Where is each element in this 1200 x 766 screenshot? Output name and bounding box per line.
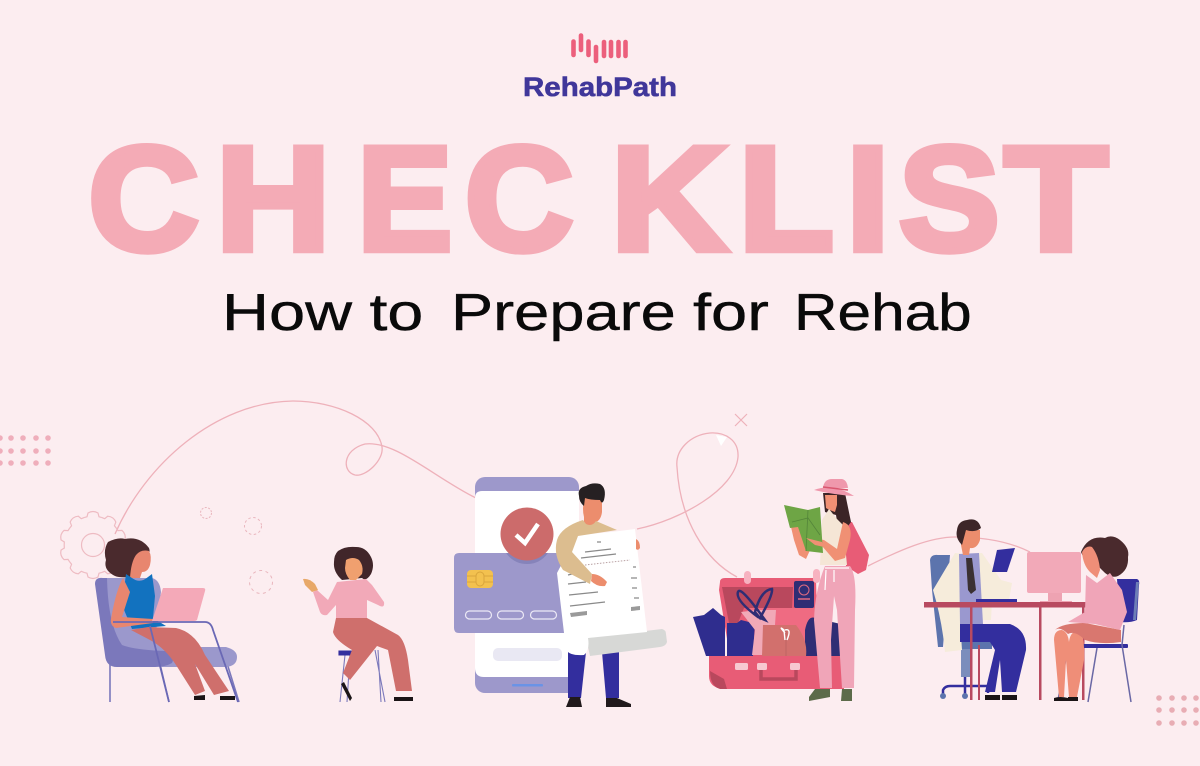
blue top bbox=[122, 574, 166, 629]
doctor chair bbox=[930, 555, 992, 699]
phone bbox=[475, 477, 579, 693]
clothes bbox=[693, 589, 848, 656]
laptop bbox=[152, 588, 205, 621]
monitor bbox=[1027, 552, 1081, 602]
shoes bbox=[194, 695, 235, 700]
traveller bbox=[784, 479, 869, 701]
left forearm behind map bbox=[791, 525, 811, 559]
hat bbox=[814, 479, 854, 496]
icon: gear outline bbox=[58, 512, 128, 578]
trousers bbox=[568, 652, 619, 698]
sweater bbox=[556, 520, 617, 584]
figure: phone, credit card and man with receipt bbox=[454, 477, 667, 707]
subtitle: How bbox=[222, 284, 353, 341]
icon: cross mark bbox=[735, 414, 747, 426]
title: CHECKLIST: I bbox=[846, 116, 889, 281]
tie bbox=[966, 558, 976, 594]
shoes bbox=[341, 682, 413, 701]
laptop on desk bbox=[976, 599, 1017, 602]
title: CHECKLIST: L bbox=[739, 117, 834, 282]
subtitle: for bbox=[693, 284, 769, 341]
subtitle bbox=[222, 283, 972, 342]
sweater bbox=[313, 579, 384, 618]
doctor trousers bbox=[960, 624, 1026, 692]
face bbox=[345, 558, 363, 580]
stool bbox=[339, 650, 385, 702]
armchair bbox=[95, 578, 239, 702]
arm bbox=[805, 522, 851, 561]
title: CHECKLIST: K bbox=[611, 116, 727, 281]
chair arm bbox=[113, 622, 238, 702]
face bbox=[825, 495, 837, 512]
figure: suitcase and traveller with map bbox=[693, 479, 869, 701]
title: CHECKLIST: T bbox=[1004, 116, 1108, 282]
arm bbox=[111, 578, 153, 628]
tablet bbox=[992, 548, 1015, 572]
title: CHECKLIST: E bbox=[358, 116, 452, 281]
hair bbox=[334, 547, 373, 580]
face bbox=[130, 550, 151, 578]
credit card bbox=[454, 553, 572, 633]
suitcase lid bbox=[719, 569, 820, 657]
icon: paper plane tip bbox=[716, 435, 727, 446]
hair bbox=[105, 538, 150, 577]
boots bbox=[809, 689, 852, 701]
figure: woman with laptop in armchair bbox=[95, 538, 239, 702]
icon: pulse bars bbox=[574, 36, 626, 61]
patient shoes bbox=[1054, 697, 1078, 701]
suitcase base bbox=[709, 656, 844, 689]
receipt roll bbox=[586, 629, 667, 656]
pointing hand bbox=[806, 538, 824, 547]
trousers bbox=[333, 618, 412, 691]
head bbox=[579, 483, 605, 532]
map bbox=[784, 505, 823, 553]
trousers bbox=[814, 566, 855, 688]
title: CHECKLIST: C bbox=[465, 116, 573, 282]
shoes bbox=[566, 697, 631, 707]
decorative dots: right bbox=[1156, 695, 1199, 726]
backpack bbox=[843, 522, 869, 574]
subtitle: to bbox=[370, 284, 423, 342]
patient hair bbox=[1081, 536, 1128, 577]
trousers bbox=[131, 627, 229, 695]
title: CHECKLIST: H bbox=[216, 117, 330, 282]
subtitle: Rehab bbox=[794, 283, 972, 341]
decorative dots: left bbox=[0, 435, 51, 466]
patient chair bbox=[1058, 579, 1139, 702]
logo: RehabPath bbox=[523, 36, 677, 102]
patient skirt bbox=[1055, 623, 1121, 643]
title: CHECKLIST bbox=[88, 116, 1108, 282]
hand bbox=[303, 579, 318, 592]
figure: doctor and patient at desk bbox=[924, 519, 1139, 702]
doctor shoes bbox=[985, 695, 1017, 700]
doctor shirt bbox=[959, 553, 983, 624]
title: CHECKLIST: C bbox=[88, 116, 199, 281]
title: CHECKLIST: S bbox=[899, 116, 999, 282]
doctor coat bbox=[933, 553, 1012, 652]
patient legs bbox=[1054, 630, 1084, 697]
desk bbox=[924, 602, 1087, 700]
subtitle: Prepare bbox=[451, 284, 676, 342]
doctor head bbox=[957, 519, 981, 555]
patient top bbox=[1068, 573, 1127, 630]
logo wordmark: RehabPath bbox=[523, 72, 677, 102]
patient face bbox=[1082, 547, 1100, 578]
decorative dotted circles bbox=[200, 508, 272, 594]
top bbox=[820, 509, 847, 565]
receipt bbox=[557, 529, 647, 655]
check badge bbox=[500, 508, 554, 564]
figure: woman on phone on stool bbox=[303, 547, 413, 702]
hair bbox=[823, 493, 851, 534]
hands bbox=[591, 539, 640, 586]
connecting path line bbox=[115, 401, 1030, 577]
